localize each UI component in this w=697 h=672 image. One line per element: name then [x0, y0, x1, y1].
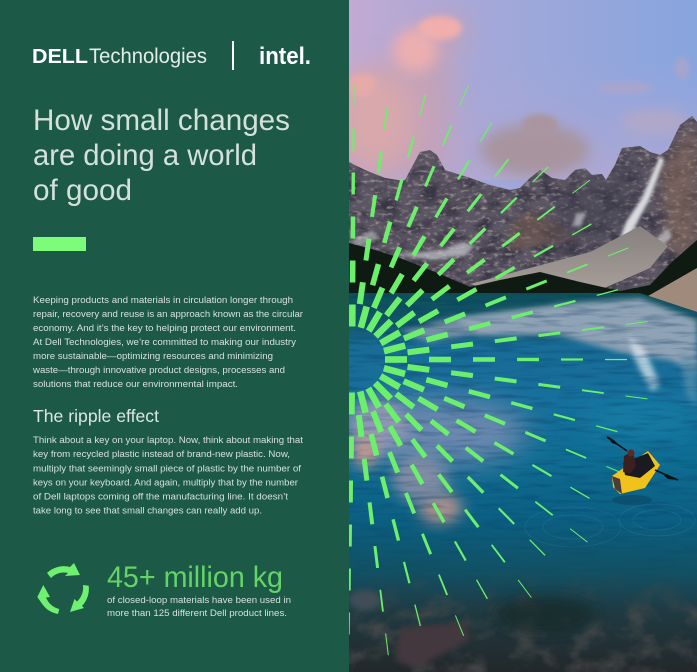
- statistic: 45+ million kg: 45+ million kg: [107, 561, 283, 594]
- intro paragraph: solutions that reduce our environmental impact.: [33, 379, 238, 390]
- logo: Dell Technologies: [32, 45, 207, 68]
- photo: lake: [348, 293, 697, 672]
- intro paragraph: economy. And it’s the key to helping protect our environment.: [33, 323, 296, 334]
- logo: Intel: intel.: [259, 43, 311, 70]
- photo: sky: [349, 0, 697, 190]
- photo: lake reflections: [349, 293, 697, 534]
- ripple ticks fan: [346, 84, 648, 655]
- intro paragraph: At Dell Technologies, we’re committed to making our industry: [33, 337, 296, 348]
- photo: mountains: [349, 110, 697, 300]
- logo: Dell Technologies: Technologies: [89, 45, 207, 68]
- ripple paragraph: Think about a key on your laptop. Now, think about making that: [33, 435, 303, 446]
- intro paragraph: repair, recovery and reuse is an approach known as the circular: [33, 309, 304, 320]
- photo: scree slope: [470, 226, 668, 292]
- statistic description: of closed-loop materials have been used in: [107, 595, 291, 606]
- photo: mountain lake with kayak: [335, 0, 697, 672]
- ripple paragraph: key from recycled plastic instead of brand-new plastic. Now,: [33, 449, 290, 460]
- accent bar: [33, 237, 86, 251]
- ripple paragraph: of Dell laptops coming off the manufacturing line. It doesn’t: [33, 492, 288, 502]
- title: of good: [33, 174, 132, 207]
- intro paragraph: waste—through innovative product designs, processes and: [32, 365, 285, 376]
- title: are doing a world: [33, 139, 257, 172]
- photo: ripples around kayak: [525, 504, 695, 547]
- icon: recycling arrows: [37, 563, 89, 614]
- photo: clouds: [335, 15, 690, 180]
- statistic description: [107, 595, 291, 619]
- title: How small changes: [33, 104, 290, 137]
- photo: snow streaks: [349, 156, 672, 260]
- title: [33, 104, 290, 207]
- ripple paragraph: take long to see that small changes can really add up.: [33, 506, 262, 516]
- intro paragraph: [32, 295, 304, 390]
- ripple paragraph: multiply that seemingly small piece of plastic by the number of: [33, 464, 301, 474]
- ripple paragraph: [33, 435, 303, 516]
- logo: Dell Technologies: DELL: [32, 46, 88, 68]
- intro paragraph: Keeping products and materials in circulation longer through: [33, 295, 293, 306]
- photo: forest and far shore: [349, 240, 697, 312]
- panel: dark green text column: [0, 0, 349, 672]
- statistic description: more than 125 different Dell product lines.: [107, 608, 287, 619]
- intro paragraph: more sustainable—optimizing resources and minimizing: [33, 351, 273, 362]
- photo: submerged rocks: [349, 582, 697, 672]
- logo divider: [232, 41, 234, 70]
- ripple paragraph: keys on your keyboard. And again, multiply that by the number: [33, 478, 299, 488]
- photo: yellow kayak with paddler: [607, 436, 678, 505]
- heading: the ripple effect: The ripple effect: [33, 406, 159, 426]
